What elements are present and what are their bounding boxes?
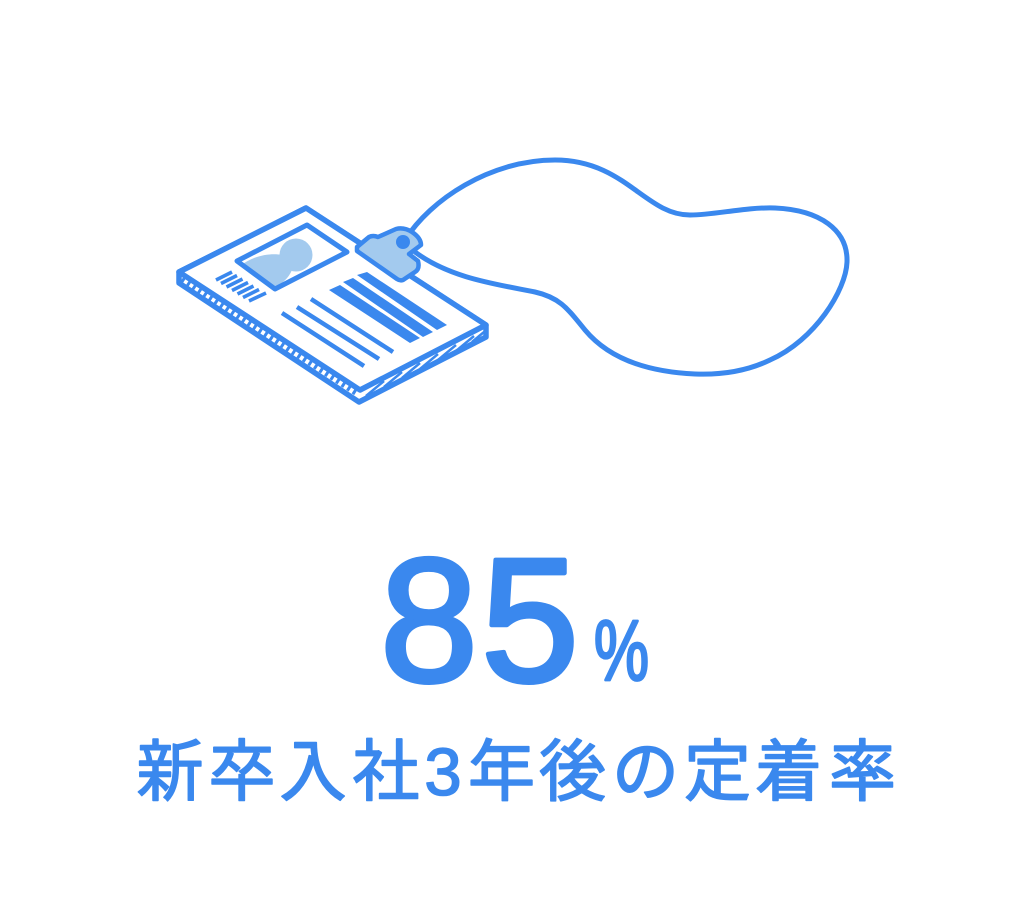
bold text bars xyxy=(329,272,447,343)
illustration: ID badge with lanyard xyxy=(179,160,847,402)
card body xyxy=(179,208,486,402)
left edge hatch xyxy=(182,279,358,394)
thin text lines xyxy=(282,299,393,366)
photo outline xyxy=(237,225,347,289)
photo frame with person xyxy=(237,225,347,292)
right edge hatch xyxy=(366,332,484,396)
caption: 新卒入社3年後の定着率 xyxy=(136,735,896,810)
big number 85: 85 xyxy=(380,523,579,719)
lanyard xyxy=(405,160,847,374)
infographic xyxy=(138,158,894,802)
percent sign: % xyxy=(594,604,649,699)
person silhouette xyxy=(244,238,312,286)
badge clip xyxy=(357,228,421,280)
card face xyxy=(179,208,486,390)
card edge xyxy=(179,208,486,402)
small hatched label xyxy=(216,272,266,301)
